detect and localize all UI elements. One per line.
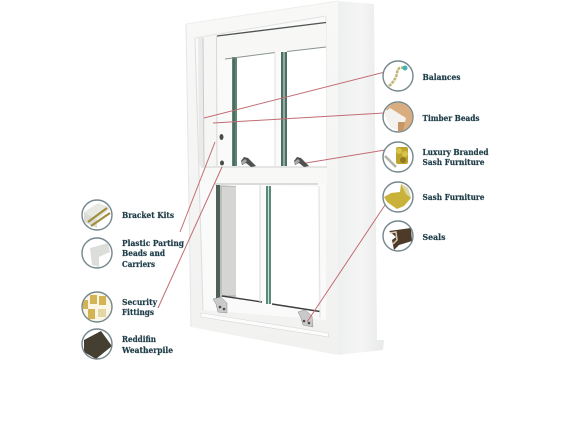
window illustration bbox=[186, 1, 384, 355]
label: bracket kits: Bracket Kits bbox=[122, 211, 174, 221]
label: luxury branded sash furniture bbox=[422, 148, 489, 168]
side channel bbox=[198, 36, 217, 166]
label: balances: Balances bbox=[422, 73, 461, 83]
icon: bracket kits bbox=[82, 200, 112, 230]
icon: seals bbox=[383, 221, 413, 251]
label: reddifin weatherpile bbox=[121, 335, 174, 356]
label: security fittings: Security bbox=[122, 298, 158, 308]
icon: balances bbox=[383, 61, 413, 91]
meeting rail bbox=[201, 167, 327, 184]
label: seals: Seals bbox=[422, 233, 446, 243]
lower sash panes bbox=[215, 184, 320, 318]
label: plastic parting beads and carriers: Carriers bbox=[122, 260, 155, 270]
icon: luxury branded sash furniture bbox=[383, 142, 413, 172]
leader lines bbox=[158, 72, 385, 322]
icon: sash furniture bbox=[383, 182, 413, 212]
sill lip bbox=[201, 313, 329, 337]
icon: plastic parting beads and carriers bbox=[82, 238, 112, 268]
icon: timber beads bbox=[383, 102, 414, 132]
label: plastic parting beads and carriers bbox=[122, 239, 184, 270]
label: reddifin weatherpile: Weatherpile bbox=[121, 346, 174, 356]
icon: security fittings bbox=[82, 292, 112, 322]
label: luxury branded sash furniture: Luxury Branded bbox=[422, 148, 489, 158]
label: luxury branded sash furniture: Sash Furniture bbox=[422, 158, 485, 168]
label: timber beads: Timber Beads bbox=[422, 114, 480, 124]
label: security fittings: Fittings bbox=[122, 308, 154, 318]
top sash panes bbox=[225, 47, 326, 166]
label: plastic parting beads and carriers: Plastic Parting bbox=[122, 239, 184, 249]
infographic: sash window components bbox=[81, 0, 488, 360]
label: security fittings bbox=[122, 298, 158, 318]
icon: reddifin weatherpile bbox=[82, 329, 112, 359]
label: plastic parting beads and carriers: Beads and bbox=[122, 249, 165, 259]
label: sash furniture: Sash Furniture bbox=[422, 193, 485, 203]
label: reddifin weatherpile: Reddifin bbox=[122, 335, 156, 345]
sash fittings bbox=[213, 134, 313, 327]
